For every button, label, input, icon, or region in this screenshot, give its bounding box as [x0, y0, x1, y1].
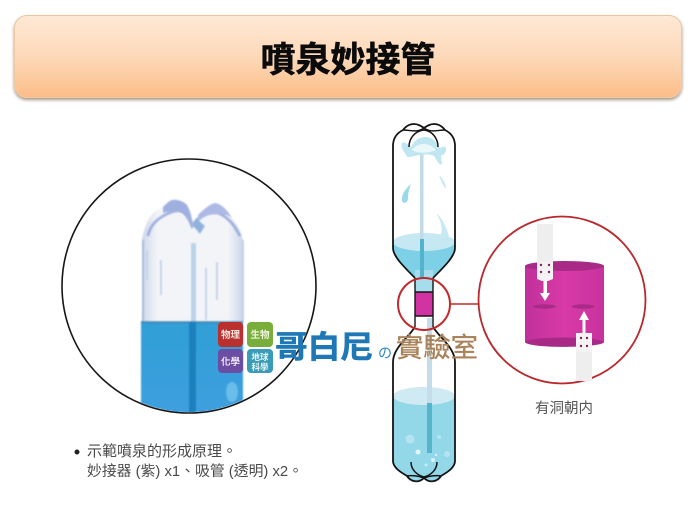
- title: 噴泉妙接管: [260, 32, 436, 83]
- bottle body: [142, 200, 243, 322]
- water: [394, 398, 454, 480]
- fountain jet: [420, 154, 424, 239]
- note line 2: 妙接器 (紫) x1、吸管 (透明) x2。: [87, 462, 303, 480]
- tile: chemistry: [218, 349, 243, 373]
- magenta cylinder: [525, 266, 604, 346]
- caption: holes face inward: 有洞朝内: [535, 400, 593, 417]
- tile: earth science: 科學: [251, 361, 269, 373]
- magnified coupling: [525, 224, 604, 381]
- callout: red circle and leader line: [398, 216, 646, 384]
- tile: chemistry: 化學: [221, 354, 240, 368]
- blue water: [141, 322, 243, 422]
- tile: biology: 生物: [250, 327, 270, 341]
- connector: magenta coupling: [415, 278, 433, 327]
- logo text blue: 哥白尼: [275, 322, 373, 367]
- middle diagram: top bottle with fountain: [392, 123, 456, 278]
- watermark logo: [218, 322, 478, 373]
- tile: earth science: [247, 349, 273, 373]
- tile: physics: 物理: [221, 327, 240, 341]
- bullet dot: [74, 450, 80, 454]
- fountain spray: [402, 137, 446, 164]
- bottle crown shading: [148, 211, 240, 236]
- bottle outline: [393, 124, 455, 278]
- straw: [427, 318, 432, 403]
- logo text brown: 實驗室: [396, 326, 478, 365]
- arrow down: [540, 281, 550, 301]
- bubbles: [406, 434, 414, 444]
- tile: earth science: 地球: [251, 351, 269, 363]
- photo circle: bottle close-up: [62, 159, 316, 422]
- bottle outline: [393, 327, 455, 481]
- water: [394, 244, 454, 277]
- bullet note: [74, 442, 303, 480]
- lower straw: [576, 346, 592, 381]
- note line 1: 示範噴泉的形成原理。: [87, 442, 237, 460]
- tile: physics: [218, 322, 243, 347]
- arrow up: [579, 311, 589, 333]
- logo の: の: [378, 343, 392, 363]
- water drops: [402, 184, 411, 203]
- title banner: [14, 15, 682, 98]
- middle diagram: bottom bottle: [392, 318, 456, 482]
- tile: biology: [247, 322, 273, 347]
- holes: [533, 304, 556, 309]
- upper straw: [537, 224, 553, 266]
